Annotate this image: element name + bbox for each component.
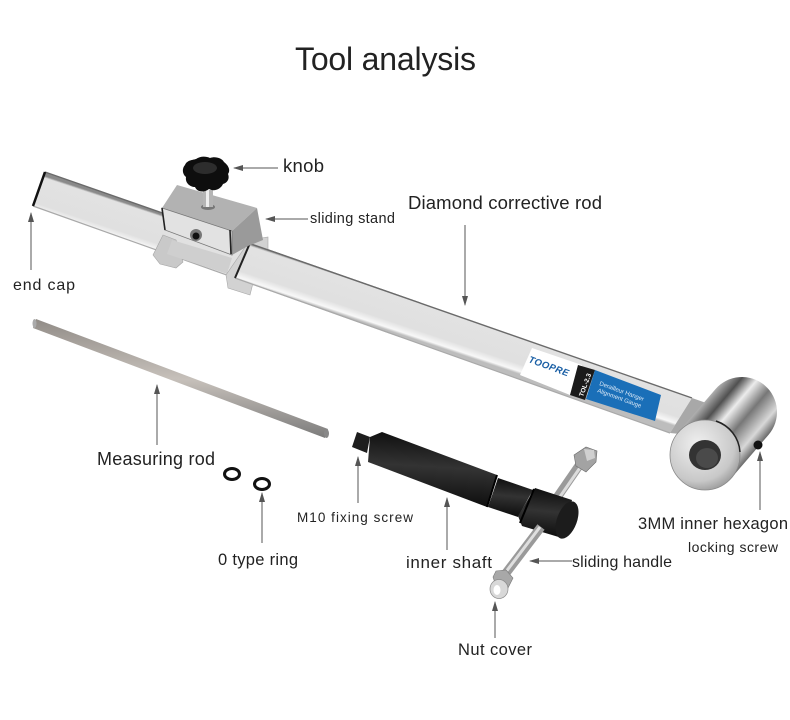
- arrow: locking screw: [759, 452, 761, 510]
- rod label: brand sticker: Derailleur Hanger: [598, 381, 645, 403]
- sliding stand: [153, 185, 420, 337]
- label: O ring: 0 type ring: [218, 551, 298, 569]
- collar: [670, 398, 762, 490]
- label: sliding handle: sliding handle: [572, 554, 672, 571]
- arrow: knob: [234, 167, 278, 169]
- arrow: diamond corrective rod: [464, 225, 466, 305]
- label: M10 screw: M10 fixing screw: [297, 510, 413, 525]
- label: sliding stand: sliding stand: [310, 211, 395, 227]
- inner shaft: [352, 432, 583, 542]
- arrow: M10 screw: [357, 457, 359, 503]
- label: knob: knob: [283, 155, 324, 176]
- arrow: measuring rod: [156, 385, 158, 445]
- rod label: brand sticker: TOL-2.3: [578, 372, 593, 398]
- knob: [183, 157, 229, 210]
- arrow: sliding stand: [266, 218, 308, 220]
- arrow: inner shaft: [446, 498, 448, 550]
- bar overlay: [235, 243, 420, 337]
- arrow: O ring: [261, 493, 263, 543]
- M10 thread: [352, 432, 370, 453]
- label: nut cover: Nut cover: [458, 641, 532, 659]
- stand top face: [162, 185, 257, 231]
- sliding handle upper: [556, 447, 597, 501]
- rod label: brand sticker: Alignment Gauge: [596, 388, 643, 410]
- label: diamond corrective rod: Diamond corrective rod: [408, 192, 602, 213]
- end cap: [33, 172, 45, 206]
- label: measuring rod: Measuring rod: [97, 449, 215, 469]
- corrective rod: [33, 172, 692, 433]
- right bracket foot: [226, 237, 268, 295]
- left bracket foot: [153, 235, 183, 268]
- arrow: sliding handle: [530, 560, 572, 562]
- title: Tool analysis: [295, 41, 476, 77]
- label: inner shaft: inner shaft: [406, 553, 492, 572]
- sliding handle lower: [490, 527, 541, 598]
- rod label: brand sticker: [520, 348, 661, 421]
- stand side face: [232, 208, 263, 255]
- label: 3MM inner hexagon: 3MM inner hexagon: [638, 515, 788, 533]
- measuring rod: [32, 319, 329, 438]
- arrow: end cap: [30, 213, 32, 270]
- stand front face: [162, 208, 232, 255]
- label: locking screw: locking screw: [688, 539, 779, 555]
- arrow: nut cover: [494, 602, 496, 638]
- O rings: [224, 468, 270, 490]
- under section: [167, 240, 232, 274]
- label: end cap: end cap: [13, 277, 75, 294]
- rod label: brand sticker: TOOPRE: [527, 354, 571, 379]
